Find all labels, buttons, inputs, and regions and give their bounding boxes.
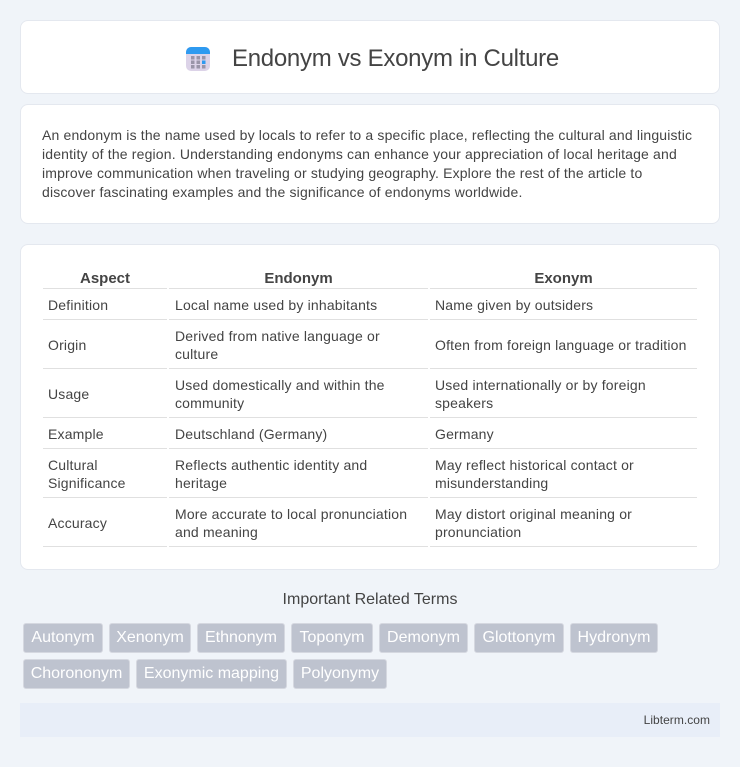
tag: Exonymic mapping: [144, 665, 279, 682]
intro paragraph: discover fascinating examples and the significance of endonyms worldwide.: [42, 184, 523, 200]
tag: [474, 623, 564, 653]
row: definition: [48, 297, 593, 313]
row: accuracy: More accurate to local pronunciation: [175, 506, 407, 522]
comparison table card: [20, 244, 720, 570]
row: definition: Local name used by inhabitants: [175, 297, 377, 313]
tag: [197, 623, 285, 653]
row: accuracy: May distort original meaning or: [435, 506, 632, 522]
footer credit: Libterm.com: [644, 713, 710, 727]
column headers: Exonym: [534, 270, 593, 287]
row: usage: speakers: [435, 395, 493, 411]
row: origin: Derived from native language or: [175, 328, 380, 344]
column headers: [80, 270, 593, 287]
row: cultural significance: Reflects authentic identity and: [175, 457, 367, 473]
row: usage: community: [175, 395, 244, 411]
tag: [23, 659, 130, 689]
tag: Demonym: [387, 629, 460, 646]
column headers: Endonym: [264, 270, 333, 287]
tag: Chorononym: [31, 665, 122, 682]
row: example: Germany: [435, 426, 494, 442]
row: definition: Name given by outsiders: [435, 297, 593, 313]
tag: [293, 659, 387, 689]
tag: Xenonym: [116, 629, 184, 646]
row: origin: Origin: [48, 337, 86, 353]
row: origin: culture: [175, 346, 218, 362]
row: cultural significance: [48, 457, 634, 491]
tag: Polyonymy: [301, 665, 379, 682]
intro paragraph: An endonym is the name used by locals to refer to a specific place, reflecting the cultural and linguistic: [42, 127, 692, 143]
row: accuracy: Accuracy: [48, 515, 107, 531]
comparison table: [43, 270, 697, 547]
related terms tags: [23, 623, 658, 689]
row: accuracy: pronunciation: [435, 524, 521, 540]
tag: [23, 623, 103, 653]
intro paragraph: improve communication when traveling or studying geography. Explore the rest of the article to: [42, 165, 642, 181]
row: usage: Usage: [48, 386, 89, 402]
footer bar: [20, 703, 720, 737]
tag: [379, 623, 468, 653]
row: example: Deutschland (Germany): [175, 426, 327, 442]
row: cultural significance: Significance: [48, 475, 126, 491]
row: origin: [48, 328, 687, 362]
row: usage: Used domestically and within the: [175, 377, 385, 393]
row: example: Example: [48, 426, 104, 442]
tag: Toponym: [300, 629, 364, 646]
row: origin: Often from foreign language or tradition: [435, 337, 687, 353]
tag: Ethnonym: [205, 629, 277, 646]
column headers: Aspect: [80, 270, 130, 287]
tag: Autonym: [31, 629, 95, 646]
icon: calendar: [186, 47, 210, 71]
tag: [291, 623, 373, 653]
related terms heading: Important Related Terms: [283, 591, 457, 608]
tag: [109, 623, 191, 653]
intro paragraph: [42, 127, 692, 200]
row: accuracy: [48, 506, 632, 540]
row: cultural significance: May reflect historical contact or: [435, 457, 634, 473]
tag: [570, 623, 658, 653]
intro paragraph: identity of the region. Understanding endonyms can enhance your appreciation of local heritage and: [42, 146, 677, 162]
row: usage: Used internationally or by foreign: [435, 377, 646, 393]
tag: Hydronym: [578, 629, 650, 646]
row: example: [48, 426, 494, 442]
row: cultural significance: Cultural: [48, 457, 98, 473]
row: cultural significance: misunderstanding: [435, 475, 548, 491]
title: Endonym vs Exonym in Culture: [232, 45, 559, 72]
tag: Glottonym: [483, 629, 555, 646]
row: accuracy: and meaning: [175, 524, 258, 540]
header card: [20, 20, 720, 94]
tag: [136, 659, 287, 689]
row: cultural significance: heritage: [175, 475, 227, 491]
row: usage: [48, 377, 646, 411]
intro text card: [20, 104, 720, 224]
row: definition: Definition: [48, 297, 108, 313]
